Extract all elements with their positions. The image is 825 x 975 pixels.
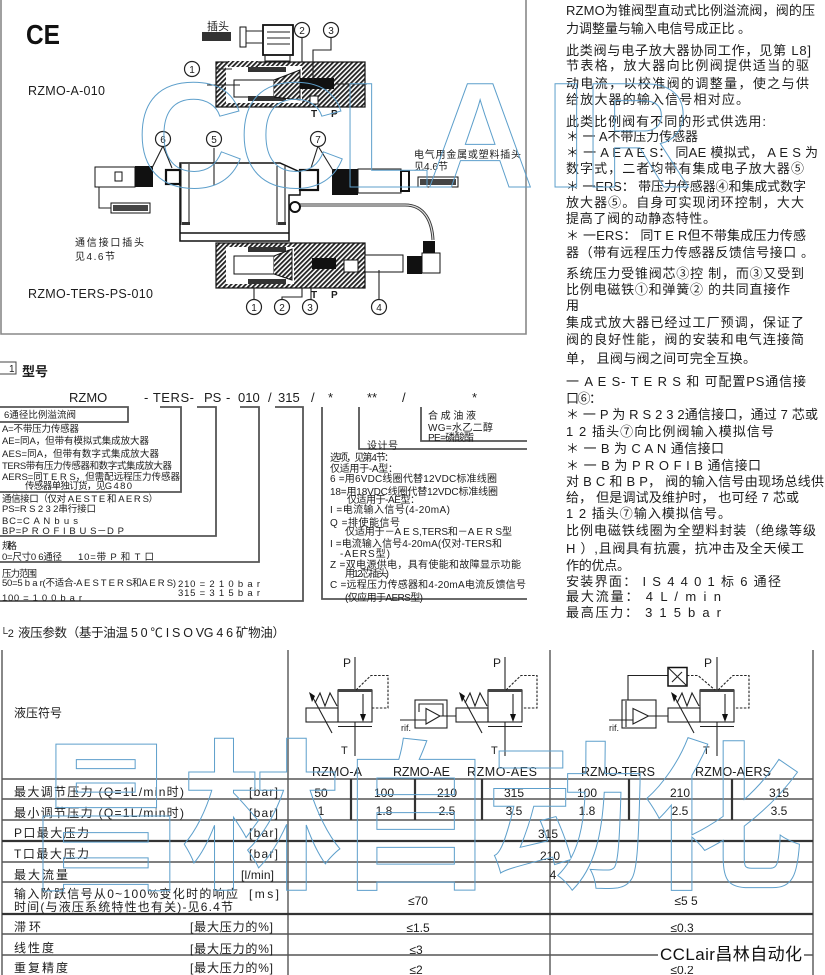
panel: description text: 力调整量与输入电信号成正比 。	[566, 21, 751, 36]
symbol: RZMO-TERS and RZMO-AERS: P	[704, 656, 712, 670]
symbol: RZMO-TERS and RZMO-AERS: rif.	[609, 723, 619, 733]
text block: model code right legend: 仅适用于-AE型：	[347, 493, 420, 506]
text block: model code right legend: 设计号	[367, 439, 398, 452]
table values: 3.5	[506, 804, 523, 818]
table column headers: RZMO-A	[312, 765, 363, 779]
diagram: RZMO-TERS-PS valve	[216, 241, 440, 301]
text block: model code left legend: 6通径比例溢流阀	[4, 409, 76, 421]
panel: description text: 此类阀与电子放大器协同工作，见第 L8]	[566, 43, 811, 58]
model code line: 315	[278, 390, 300, 405]
table values: 50	[314, 786, 328, 800]
section heading: model code: 型号	[22, 364, 48, 379]
model code line: /	[402, 390, 406, 405]
text block: model code left legend: 传感器单独订货，见G 4 8 0	[25, 480, 132, 492]
watermark: CCLAIR outline: C	[136, 51, 244, 219]
symbol: RZMO-TERS and RZMO-AERS	[609, 656, 749, 757]
watermark: CCLAIR outline: L	[340, 51, 432, 219]
text block: model code right legend: 18=用18VDC线圈代替12VDC标准线圈	[330, 485, 498, 498]
diagram: RZMO-A valve	[202, 19, 367, 120]
panel: description text: RZMO为锥阀型直动式比例溢流阀，阀的压	[566, 3, 815, 18]
callouts: numbered parts: 1	[189, 65, 195, 76]
text block: model code right legend: 用12芯插头)	[345, 567, 389, 580]
table row labels: 时间(与液压系统特性也有关)-见6.4节	[14, 899, 233, 914]
text block: model code right legend: I =电流输入信号(4-20mA)	[330, 503, 450, 516]
diagram: integrated amplifier and connectors: 见4.6节	[75, 251, 115, 263]
text block: model code left legend: 100 = 1 0 0 b a r	[2, 593, 82, 604]
text block: model code right legend	[330, 409, 526, 604]
model code connector lines	[0, 407, 527, 601]
table values: 315	[538, 827, 558, 841]
watermark: CCLAIR outline: C	[238, 51, 346, 219]
table: hydraulic parameters	[2, 650, 813, 975]
callouts: numbered parts: 1	[251, 303, 257, 314]
panel: description text: 此类比例阀有不同的形式供选用:	[566, 114, 766, 129]
panel: valve assembly drawings	[1, 0, 526, 334]
row label: hydraulic symbol: 液压符号	[14, 705, 62, 720]
panel: description text: 器（带有远程压力传感器反馈信号接口 。	[566, 245, 814, 260]
text block: model code right legend: 仅适用于－A E S,TERS和－A E R S型	[345, 525, 512, 538]
table values: 2.5	[439, 804, 456, 818]
text block: model code right legend: (仅应用于AERS型)	[345, 591, 423, 604]
text block: model code left legend: 0=尺寸0 6通径	[2, 551, 62, 563]
diagram: integrated amplifier and connectors: 通信接口插头	[75, 236, 144, 249]
watermark: CCLAIR outline: A	[426, 51, 534, 219]
watermark: CCLAIR outline: R	[583, 51, 691, 219]
table row labels: [最大压力的%]	[190, 941, 273, 956]
text block: model code right legend: -AERS型)	[340, 547, 390, 560]
section heading: model code	[0, 362, 48, 379]
panel: description text: 比例电磁铁线圈为全塑料封装（绝缘等级	[566, 523, 816, 538]
text block: model code right legend: I =电流输入信号4-20mA(仅对-TERS和	[330, 537, 502, 550]
diagram: RZMO-TERS-PS valve: P	[331, 290, 338, 301]
watermark: Chinese company name outline: 化	[642, 730, 804, 911]
model code line: **	[367, 390, 377, 405]
text block: model code right legend: C =远程压力传感器和4-20mA电流反馈信号	[330, 578, 526, 591]
text block: model code left legend: TERS带有压力传感器和数字式集成放大器	[2, 460, 172, 472]
table row labels: [最大压力的%]	[190, 919, 273, 934]
diagram: RZMO-A valve: 插头	[207, 19, 229, 33]
diagram: RZMO-A valve: P	[331, 109, 338, 120]
label: RZMO-TERS-PS-010: RZMO-TERS-PS-010	[28, 287, 153, 301]
watermark: CCLAIR outline	[136, 51, 691, 219]
table values: 210	[437, 786, 457, 800]
table values: 210	[540, 849, 560, 863]
table values: ≤0.3	[670, 921, 694, 935]
table row labels: 线性度	[14, 940, 54, 955]
panel: description text: 给放大器的输入信号相对应。	[566, 92, 749, 107]
panel: description text: 最高压力： 3 1 5 b a r	[566, 605, 722, 620]
callouts: numbered parts: 6	[160, 135, 166, 146]
table row labels: [bar]	[249, 785, 278, 799]
panel: description text: 节表格，放大器向比例阀提供适当的驱	[566, 58, 809, 73]
table values: 4	[550, 868, 557, 882]
table row labels: [bar]	[249, 847, 278, 861]
panel: description text: 一 A E S- T E R S 和 可配置PS通信接	[566, 374, 806, 389]
table row labels: 重复精度	[14, 960, 68, 975]
table row labels: T口最大压力	[14, 847, 89, 861]
panel: description text: ＊ 一 B 为 C A N 通信接口	[566, 441, 724, 456]
text block: model code left legend: 10=带 P 和 T 口	[78, 552, 154, 563]
watermark: Chinese company name outline	[25, 730, 804, 911]
table values: 1.8	[579, 804, 596, 818]
panel: description text: 安装界面： I S 4 4 0 1 标 6 通径	[566, 574, 781, 589]
table column headers: RZMO-AES	[467, 765, 537, 779]
table row labels: [bar]	[249, 826, 278, 840]
watermark: Chinese company name outline: 自	[334, 730, 496, 911]
table row labels: P口最大压力	[14, 826, 89, 840]
callouts: numbered parts: 3	[328, 26, 334, 37]
table values: 315	[769, 786, 789, 800]
diagram: RZMO-A valve: T	[311, 109, 317, 120]
panel: description text: 用。	[566, 298, 586, 313]
text block: model code left legend: 210 = 2 1 0 b a r	[178, 579, 260, 590]
model code line: -	[226, 390, 230, 405]
panel: description text: ＊ 一 A E A E S： 同AE 模拟式， A E S 为	[566, 145, 818, 160]
text block: model code left legend	[2, 409, 260, 604]
panel: description text: 动电流，以校准阀的调整量，使之与供	[566, 76, 809, 91]
table row labels: [最大压力的%]	[190, 960, 273, 975]
panel: description text	[566, 3, 824, 620]
diagram: integrated amplifier and connectors: 见4.6节	[414, 161, 448, 173]
table row labels: 最大调节压力 (Q=1L/min时)	[14, 785, 184, 799]
symbol: RZMO-TERS and RZMO-AERS: T	[703, 745, 710, 757]
panel: description text: ＊ 一 B 为 P R O F I B 通信接口	[566, 458, 761, 473]
text block: model code left legend: AE=同A，但带有模拟式集成放大器	[2, 435, 149, 447]
text block: model code left legend: A=不带压力传感器	[2, 423, 79, 435]
table values: 1	[318, 804, 325, 818]
section heading: hydraulic parameters: 液压参数（基于油温 5 0 ℃ I S O VG 4 6 矿物油）	[18, 625, 285, 640]
model code line: 010	[238, 390, 260, 405]
callouts: numbered parts: 7	[315, 135, 321, 146]
table values: 3.5	[771, 804, 788, 818]
panel: description text: H ）,且阀具有抗震，抗冲击及全天候工	[566, 541, 804, 556]
table row labels: [ms]	[249, 887, 279, 901]
text block: model code right legend: WG=水乙二醇	[428, 421, 493, 434]
symbol: RZMO-AE and RZMO-AES	[400, 656, 537, 757]
table column headers: RZMO-TERS	[581, 765, 655, 779]
model code line: - TERS-	[144, 390, 194, 405]
text block: model code left legend: 315 = 3 1 5 b a r	[178, 588, 260, 599]
panel: description text: ＊ 一 P 为 R S 2 3 2通信接口，通过 7 芯或	[566, 407, 818, 422]
panel: description text: 1 2 插头⑦输入模拟信号。	[566, 506, 731, 521]
text block: model code left legend: BP=P R O F I B U S－D P	[2, 526, 124, 537]
symbol: RZMO-A	[306, 656, 388, 757]
panel: description text: 比例电磁铁①和弹簧② 的共同直接作	[566, 282, 790, 297]
callouts: numbered parts	[156, 22, 386, 314]
text block: model code right legend: 仅适用于-A型：	[330, 462, 398, 475]
panel: description text: ＊ 一ERS： 带压力传感器④和集成式数字	[566, 179, 806, 194]
table values: 315	[504, 786, 524, 800]
watermark: Chinese company name outline: 动	[486, 730, 648, 911]
table row labels: 滞环	[14, 920, 41, 934]
panel: description text: 对 B C 和 B P， 阀的输入信号由现场总线供	[566, 474, 824, 489]
symbol: RZMO-A: P	[343, 656, 351, 670]
panel: description text: 系统压力受锥阀芯③控 制，而③又受到	[566, 266, 804, 281]
icon: CE mark: CE	[26, 19, 60, 50]
table values: 100	[577, 786, 597, 800]
section heading: hydraulic parameters: └2	[0, 626, 14, 640]
callouts: numbered parts: 4	[376, 303, 382, 314]
symbol: RZMO-AE and RZMO-AES: T	[491, 745, 498, 757]
text block: model code right legend: 选项，见第 4 节：	[330, 451, 394, 464]
callouts: numbered parts: 5	[211, 135, 217, 146]
model code line: /	[311, 390, 315, 405]
table values: ≤70	[408, 894, 428, 908]
panel: description text: 提高了阀的动静态特性。	[566, 211, 716, 226]
table column headers	[312, 765, 771, 779]
text block: model code left legend: AERS=同T E R S，但需配远程压力传感器	[2, 471, 180, 483]
panel: description text: 作的优点。	[566, 558, 630, 573]
panel: description text: 集成式放大器已经过工厂预调，保证了	[566, 315, 804, 330]
panel: description text: 放大器⑤。自身可实现闭环控制，大大	[566, 195, 804, 210]
section heading: model code: 1	[9, 364, 15, 375]
text block: model code left legend: BC=C A N b u s	[2, 516, 78, 527]
table values: ≤5 5	[674, 894, 698, 908]
model code line: /	[268, 390, 272, 405]
table row labels	[14, 785, 279, 975]
table values: 2.5	[672, 804, 689, 818]
table row labels: 最小调节压力 (Q=1L/min时)	[14, 806, 184, 820]
table values	[314, 786, 789, 975]
panel: description text: 口⑥：	[566, 391, 602, 406]
text block: model code right legend: 6 =用6VDC线圈代替12VDC标准线圈	[330, 472, 497, 485]
table row labels: 最大流量	[14, 868, 68, 882]
watermark: brand label: CCLair昌林自动化	[660, 945, 802, 964]
text block: model code left legend: AES=同A，但带有数字式集成放大器	[2, 448, 159, 460]
panel: description text: ＊ 一 A不带压力传感器	[566, 129, 698, 144]
label: RZMO-A-010: RZMO-A-010	[28, 84, 105, 98]
watermark: CCLAIR outline: I	[545, 51, 587, 219]
table row labels: [l/min]	[241, 868, 274, 882]
table values: ≤3	[409, 943, 423, 957]
table row labels: [bar]	[249, 806, 278, 820]
panel: description text: 单， 且阀与阀之间可完全互换。	[566, 351, 756, 366]
model code line: RZMO	[69, 390, 107, 405]
diagram: integrated amplifier and connectors	[75, 146, 521, 263]
panel: description text: ＊ 一ERS： 同T E R但不带集成压力传感	[566, 228, 806, 243]
model code line: *	[472, 390, 477, 405]
table values: 100	[374, 786, 394, 800]
symbol: RZMO-AE and RZMO-AES: P	[493, 656, 501, 670]
watermark: Chinese company name outline: 林	[181, 730, 343, 911]
text block: model code right legend: Q =排使能信号	[330, 516, 400, 529]
panel: description text: 最大流量： 4 L / m i n	[566, 589, 721, 604]
model code line: *	[328, 390, 333, 405]
diagram: integrated amplifier and connectors: 电气用金属或塑料插头	[414, 148, 521, 161]
symbol: RZMO-AE and RZMO-AES: rif.	[401, 723, 411, 733]
text block: model code left legend: PS=R S 2 3 2串行接口	[2, 503, 96, 515]
text block: model code right legend: 合成油液	[428, 409, 476, 422]
table grid	[2, 650, 813, 975]
table column headers: RZMO-AERS	[695, 765, 771, 779]
table values: 1.8	[376, 804, 393, 818]
text block: model code left legend: 规格	[2, 540, 17, 552]
table values: ≤1.5	[406, 921, 430, 935]
text block: model code right legend: Z =双电源供电，具有使能和故障显示功能	[330, 558, 521, 571]
text block: model code left legend: 压力范围	[2, 568, 37, 580]
text block: model code left legend: 通信接口（仅对 A E S T E 和 A E R S）	[2, 493, 158, 505]
table row labels: 输入阶跃信号从0~100%变化时的响应	[14, 886, 238, 901]
text block: model code right legend: PE=磷酸酯	[428, 431, 474, 444]
diagram: RZMO-TERS-PS valve: T	[311, 290, 317, 301]
table column headers: RZMO-AE	[393, 765, 450, 779]
model code line	[69, 390, 477, 405]
text block: model code left legend: 50=5 b a r(不适合-A E S T E R S和A E R S)	[2, 577, 176, 589]
panel: description text: 数字式，二者均带有集成电子放大器⑤	[566, 161, 804, 176]
callouts: numbered parts: 2	[299, 26, 305, 37]
callouts: numbered parts: 2	[279, 303, 285, 314]
callouts: numbered parts: 3	[307, 303, 313, 314]
table values: 210	[670, 786, 690, 800]
symbol: RZMO-A: T	[341, 745, 348, 757]
watermark: Chinese company name outline: 昌	[25, 730, 187, 911]
panel: description text: 阀的良好性能，阀的安装和电气连接简	[566, 332, 804, 347]
panel: description text: 给， 但是调试及维护时， 也可经 7 芯或	[566, 490, 799, 505]
model code line: PS	[204, 390, 222, 405]
panel: description text: 1 2 插头⑦向比例阀输入模拟信号	[566, 424, 774, 439]
